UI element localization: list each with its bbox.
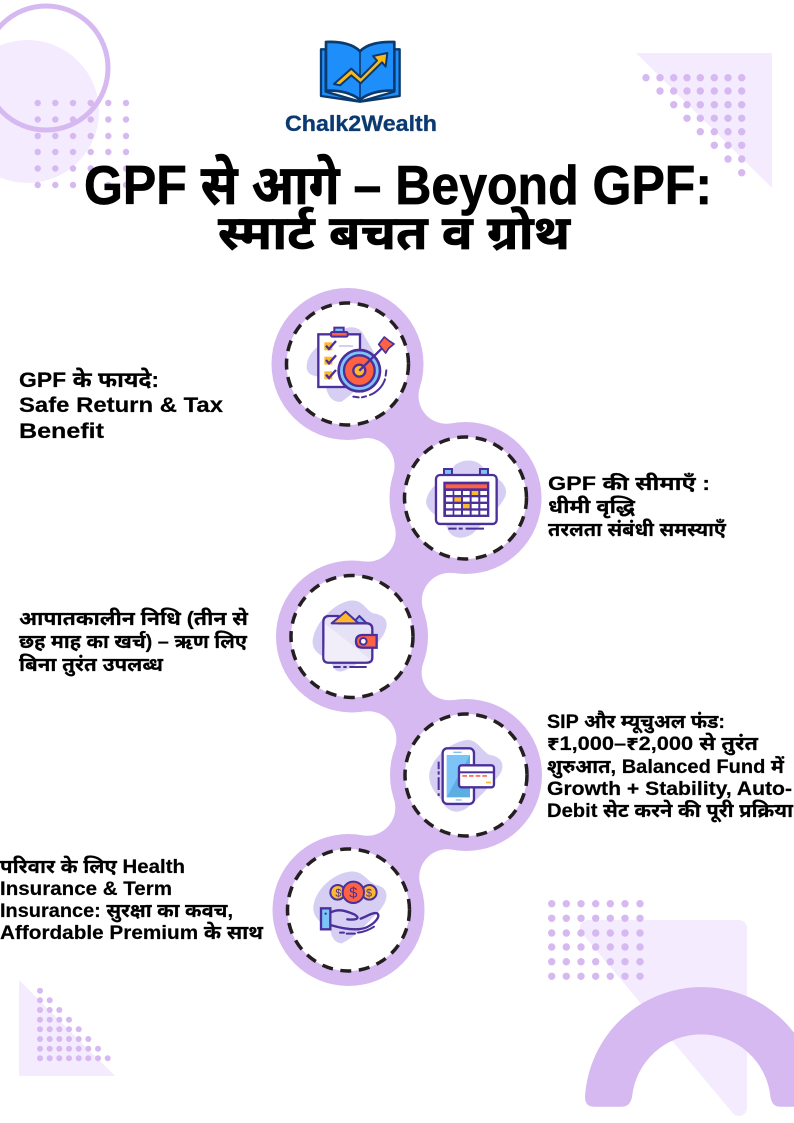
icon: calendar bbox=[426, 461, 506, 538]
text: SIP and mutual funds: ₹1,000–₹2,000 से तुरंत bbox=[547, 732, 759, 756]
text: GPF benefits: Benefit bbox=[19, 419, 104, 443]
icon: phone and card bbox=[429, 740, 502, 812]
text: GPF limitations: तरलता संबंधी समस्याएँ bbox=[548, 518, 726, 541]
text: emergency fund: आपातकालीन निधि (तीन से bbox=[19, 607, 249, 630]
text: family insurance: परिवार के लिए Health bbox=[0, 855, 185, 878]
icon: hand holding coins: $ bbox=[366, 887, 372, 899]
icon: hand holding coins: $ bbox=[349, 886, 357, 902]
text: GPF benefits: GPF के फायदे: bbox=[19, 367, 159, 392]
text: SIP and mutual funds: SIP और म्यूचुअल फंड: bbox=[547, 711, 725, 734]
decoration: bottom-right triangle, dots and arch bbox=[548, 900, 794, 1108]
text: family insurance: Insurance & Term bbox=[0, 879, 172, 900]
text: family insurance: Affordable Premium के साथ bbox=[0, 921, 264, 944]
icon: wallet bbox=[313, 601, 387, 671]
icon: open book with rising arrow bbox=[321, 42, 400, 102]
text: family insurance bbox=[0, 855, 264, 944]
text: SIP and mutual funds: शुरुआत, Balanced Fund में bbox=[547, 755, 785, 779]
text: GPF limitations: धीमी वृद्धि bbox=[548, 496, 636, 519]
text: emergency fund bbox=[19, 607, 249, 677]
decoration: top-left circles and dots bbox=[0, 6, 129, 188]
title: स्मार्ट बचत व ग्रोथ bbox=[218, 206, 572, 259]
text: SIP and mutual funds bbox=[547, 711, 793, 823]
text: SIP and mutual funds: Debit सेट करने की पूरी प्रक्रिया bbox=[547, 799, 793, 823]
logo: Chalk2Wealth bbox=[285, 42, 437, 136]
text: GPF benefits bbox=[19, 367, 223, 443]
title: GPF से आगे – Beyond GPF: bbox=[84, 154, 712, 216]
text: SIP and mutual funds: Growth + Stability, Auto- bbox=[547, 779, 792, 800]
text: GPF benefits: Safe Return & Tax bbox=[19, 393, 223, 417]
timeline: connected lilac circles bbox=[272, 288, 542, 986]
icon: hand holding coins bbox=[313, 871, 386, 943]
logo wordmark: Chalk2Wealth bbox=[285, 111, 437, 136]
icon: hand holding coins: $ bbox=[335, 887, 341, 899]
text: GPF limitations: GPF की सीमाएँ : bbox=[548, 472, 710, 495]
decoration: bottom-left triangle and dots bbox=[19, 980, 115, 1076]
text: emergency fund: बिना तुरंत उपलब्ध bbox=[19, 654, 164, 677]
decoration: top-right triangle and dots bbox=[636, 53, 772, 188]
title bbox=[84, 154, 712, 259]
text: emergency fund: छह माह का खर्च) – ऋण लिए bbox=[19, 630, 247, 653]
icon: checklist and target bbox=[307, 327, 394, 402]
text: GPF limitations bbox=[548, 472, 726, 541]
text: family insurance: Insurance: सुरक्षा का कवच, bbox=[0, 901, 233, 923]
